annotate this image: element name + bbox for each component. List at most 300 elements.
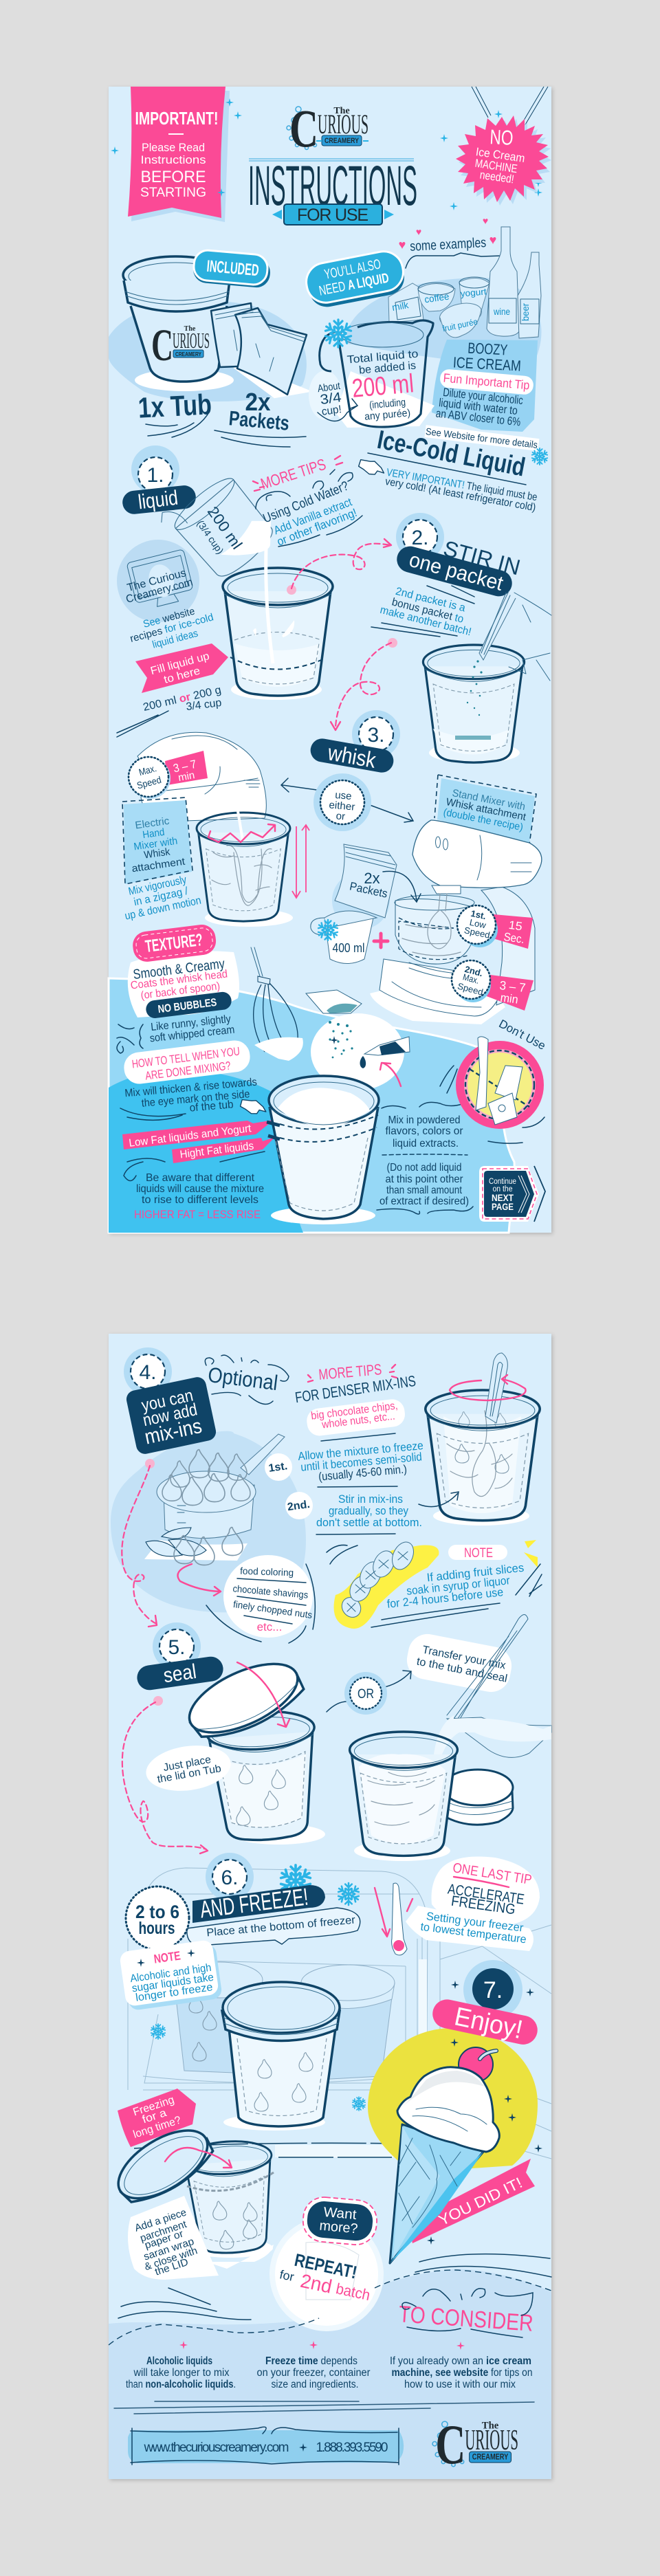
callout: just place lid: the lid on Tub [156,1763,222,1785]
note: alcoholic liquids: Alcoholic and high [129,1962,212,1985]
tag: low fat: Low Fat liquids and Yogurt [129,1123,252,1149]
text: the curious creamery.com: Creamery.com [124,577,194,606]
column: alcoholic liquids [126,2341,236,2390]
infographic: URIOUS [465,2425,518,2456]
step 4: mix-ins [124,1347,217,1455]
pill: note: NOTE [464,1546,493,1561]
panel: page one [109,87,551,1233]
column: ice cream machine: machine, see website for tips on [392,2367,532,2379]
text: like runny: Like runny, slightly [150,1013,232,1033]
label: texture [131,923,217,963]
step 7: enjoy [427,1960,542,2245]
callout: add a piece: parchment [139,2219,188,2245]
icon: big tub with mark [267,1076,379,1224]
hearts: ♥ [490,233,496,247]
label: electric hand mixer: attachment [131,856,186,874]
icon: fruit puree bowl: fruit purée [441,317,478,333]
hearts [399,215,496,252]
badge: max speed: Max. [138,762,157,778]
step 2: stir in: STIR IN [441,536,523,580]
icon: don't use: Don't Use [496,1017,548,1053]
text: second packet [371,586,474,638]
text: boozy ice cream [452,340,521,375]
text: mix in powdered: at this point other [385,1174,463,1185]
note: alcoholic liquids: sugar liquids take [131,1972,214,1994]
ribbon: place at bottom [187,1908,360,1946]
badge: max speed [129,757,170,799]
label: stand mixer: Stand Mixer with [451,787,526,813]
callout: setting freezer: to lowest temperature [420,1921,527,1946]
text: 2x packets [214,388,306,447]
text: stir in mix-ins [316,1493,422,1529]
step 2: stir in: 2. [411,527,429,549]
text: allow mixture [298,1439,424,1484]
ribbon: fill liquid [135,643,228,693]
text: stir in mix-ins: don't settle at bottom. [316,1516,422,1529]
text: no machine: NO [490,126,514,150]
hearts: ♥ [416,226,421,237]
text: mix will thicken: the eye mark on the side [141,1088,250,1110]
text: texture description: Smooth & Creamy [132,956,226,982]
icon: cup two with powder [423,645,525,763]
icon: beer bottle [518,252,541,338]
icon: extract bottle and drop [360,1037,410,1086]
icon: 2x packets and jug: Packets [349,880,389,901]
logo: footer: CREAMERY [472,2454,509,2462]
badge: second max speed: Speed [456,980,484,998]
label: included: INCLUDED [206,257,260,280]
arrow: lid to tub [237,1662,289,1727]
text: mix will thicken: Mix will thicken & rise towards [124,1077,257,1099]
step 6: and freeze: 6. [221,1867,239,1889]
tag: high fat [172,1137,275,1163]
title: instructions [248,155,417,217]
pill: want more [301,2196,379,2247]
icon: use either or: or [336,810,346,823]
snowflake on jug [324,320,352,347]
text: fruit note: soak in syrup or liquor [406,1574,511,1598]
callout: setting freezer [406,1906,534,1951]
text: like runny [117,1013,235,1053]
callout: freezing for a long time: for a [141,2107,168,2126]
text: mix vigorously: in a zigzag / [133,885,189,908]
callout: just place lid: Just place [162,1754,212,1774]
text: please read: Please Read [142,141,205,154]
callout: add a piece [128,2196,274,2280]
step 2: stir in [394,513,523,599]
step 6: and freeze: AND FREEZE! [199,1884,309,1924]
ribbon: fill liquid: Fill liquid up [149,650,211,677]
text: be aware [124,1152,265,1221]
text: very important [358,457,538,514]
zigzag arrow [208,824,275,842]
text: mix in powdered: (Do not add liquid [386,1162,462,1174]
logo: footer: C [435,2413,465,2476]
column: alcoholic liquids: Alcoholic liquids [146,2355,212,2367]
label: electric hand mixer: Hand [142,826,165,841]
icon: front freezer tub [222,1982,340,2126]
step: first: 1st. [268,1460,288,1475]
logo: curious creamery: CREAMERY [324,137,360,145]
text: allow mixture: (usually 45-60 min.) [318,1462,408,1484]
callout: add a piece: paper or [143,2228,185,2252]
ribbon: fill liquid: to here [163,665,201,686]
step 5: seal [135,1622,225,1692]
badge: 2 to 6 hours: hours [139,1919,175,1938]
column: alcoholic liquids: than non-alcoholic liquids. [126,2379,236,2390]
footer rules [114,2401,534,2414]
list: other mix-ins: chocolate shavings [232,1583,309,1600]
sign: continue on next page: on the [492,1185,513,1193]
text: website recipes: See website [142,605,196,630]
sparkles around header [111,98,542,210]
text: be aware: HIGHER FAT = LESS RISE [134,1208,261,1221]
text: about 3/4 cup: About [317,380,342,395]
pill: big chips: whole nuts, etc... [320,1411,396,1431]
icon: whisk cup [197,811,309,927]
text: please read: STARTING [140,186,206,200]
text: total liquid: any purée) [364,407,411,423]
icon: use either or: either [329,799,355,813]
icon: or badge: OR [358,1687,374,1702]
text: second packet: make another batch! [379,604,472,638]
text: second packet: bonus packet to [390,596,465,626]
decorative dashed wave [109,2270,551,2345]
icon: fruit puree bowl [437,300,484,338]
tips: more tips: MORE TIPS [258,455,328,493]
text: mix in powdered [377,1102,473,1214]
liquid examples [388,227,541,338]
callout: add a piece: saran wrap [142,2236,195,2263]
list: other mix-ins: finely chopped nuts [232,1598,313,1620]
snowflakes [151,2024,366,2111]
tips: more tips: Using Cold Water? [261,478,351,526]
callout: how to tell: HOW TO TELL WHEN YOU [131,1044,241,1071]
text: 2x packets: 2x [245,388,271,416]
icon: jug pouring into tub [433,1614,551,1760]
tag: 15 sec [493,914,533,949]
kiwi slices [338,1539,418,1621]
label: electric hand mixer: Whisk [143,846,171,861]
text: mix will thicken: of the tub [189,1099,234,1114]
logo on tub: C [151,320,173,371]
label: electric hand mixer [122,797,192,884]
text: 1x tub: 1x Tub [138,388,212,424]
text: transfer your mix: to the tub and seal [415,1655,508,1685]
text: 200 ml or 200 g [117,684,222,737]
infographic: INSTRUCTIONS [248,155,417,217]
tilted lid [179,1650,309,1750]
callout: one last tip: ONE LAST TIP [452,1860,533,1888]
heading: to consider: TO CONSIDER [398,2301,534,2337]
text: mix in powdered: Mix in powdered [388,1114,461,1126]
hearts: ♥ [483,215,488,226]
icon: thermometer [375,1883,419,1955]
text: please read [140,141,206,200]
list: other mix-ins: food coloring [240,1565,294,1578]
lower wave background [109,2269,551,2479]
badge: repeat [270,2217,384,2331]
text: transfer your mix [404,1631,515,1695]
freezer outline [128,1868,551,2159]
icon: spare lid [442,1770,513,1825]
arrow: step 5 to step 6 [122,1696,208,1853]
step 4: mix-ins: you can [140,1386,195,1416]
text: total liquid: 200 ml [351,369,415,404]
blob: mix-ins background [111,1431,306,1612]
ribbon: you did it: YOU DID IT! [436,2174,525,2229]
badge: repeat: for [278,2267,296,2284]
tips: denser mix-ins: MORE TIPS [318,1361,382,1383]
badge: 2 to 6 hours: 2 to 6 [135,1902,179,1922]
icon: measuring cup with chips [144,1434,285,1565]
badge: first low speed: 1st. [470,908,487,921]
callout: one last tip: ACCELERATE [447,1881,525,1908]
arrow: mix-ins to list [177,1564,221,1596]
footer: contact band: www.thecuriouscreamery.com [143,2441,289,2455]
yellow circle behind ice cream [368,2028,538,2172]
text: please read: Instructions [140,153,206,166]
arrow: step 4 to step 5 [122,1459,157,1627]
tips: denser mix-ins [265,1361,424,1534]
text: 200 ml or 200 g: 3/4 cup [186,697,222,713]
text: important: IMPORTANT! [135,108,219,129]
icon: use either or: use [335,789,352,802]
text: mix in powdered: flavors, colors or [385,1125,463,1137]
text: no machine: needed! [479,168,515,186]
tag: 3-7 min: 3 – 7 [172,758,197,775]
text: 200 ml or 200 g: 200 ml or 200 g [142,684,222,714]
text: texture description [130,956,228,1002]
list: other mix-ins [206,1555,315,1643]
text: no machine: Ice Cream [475,145,526,165]
text: jug volume: (3/4 cup) [195,518,226,556]
tag: 3-7 min: min [177,769,196,784]
icon: powder packet and dots [306,990,362,1058]
label: electric hand mixer: Mixer with [133,835,178,852]
logo: curious creamery [287,98,368,158]
column: freeze time: on your freezer, container [257,2367,370,2379]
subtitle: for use: FOR USE [297,206,368,225]
text: mix vigorously: up & down motion [124,895,202,923]
column: freeze time [257,2341,370,2390]
tag: 3-7 min: 3 – 7 [499,978,527,995]
heading: ice-cold liquid: Ice-Cold Liquid [375,426,527,483]
icon: cup with spoon [419,1353,540,1526]
pill: no bubbles: NO BUBBLES [157,997,217,1015]
panel: boozy ice cream tip [432,340,538,432]
text: 2x packets: Packets [228,407,290,435]
ribbon: you did it [408,2159,535,2243]
label: you'll also need a liquid [303,248,407,310]
step: first [265,1453,292,1481]
step 3: whisk: whisk [325,740,378,773]
tips: more tips: or other flavoring! [275,506,359,549]
text: boozy ice cream: BOOZY [468,340,508,359]
badge: repeat: batch [335,2280,372,2304]
badge: first low speed: Low [469,917,487,931]
text: the curious creamery.com: The Curious [126,567,188,594]
logo: footer: The [482,2421,499,2432]
text: total liquid: be added is [359,360,417,377]
ribbon: place at bottom: Place at the bottom of freezer [206,1915,356,1939]
icon: tub with logo: URIOUS [173,328,210,353]
blob: texture panel [128,951,239,1017]
callout: one last tip: FREEZING [450,1893,516,1917]
badge: second max speed: Max. [462,971,481,986]
tag: 3-7 min [485,975,534,1011]
callout: just place lid [143,1741,234,1796]
icon: milk carton: milk [391,299,410,313]
step 4: mix-ins: 4. [139,1361,157,1384]
text: mix will thicken [120,1077,268,1120]
tips: more tips [253,455,362,549]
icon: ice cream cone [390,2047,535,2263]
icon: or badge [327,1671,411,1715]
text: 1x tub [138,388,212,437]
icon: 2x packets and jug: 2x [364,870,380,887]
text: dilute: liquid with water to [438,396,518,417]
logo: footer [432,2413,518,2476]
step 5: seal: seal [162,1660,198,1687]
infographic: URIOUS [318,109,368,140]
step: second [285,1492,313,1519]
callout: freezing for a long time: Freezing [132,2094,176,2118]
badge: 2 to 6 hours [126,1886,189,1950]
text: stir in mix-ins: Stir in mix-ins [338,1493,403,1506]
tag: 3-7 min [165,751,208,785]
chocolate chips [162,1450,250,1506]
footer: contact band [128,2427,404,2465]
text: dilute: Dilute your alcoholic [442,386,524,407]
powder falling [455,660,491,740]
text: mix vigorously [124,874,202,923]
pill: want more: more? [319,2219,358,2236]
text: fruit note: If adding fruit slices [426,1561,525,1584]
label: stand mixer [434,775,536,844]
forbidden tools [476,1037,522,1125]
text: total liquid [346,349,419,423]
icon: 400 ml jug: 400 ml [333,941,364,955]
callout: how to tell: ARE DONE MIXING? [144,1059,232,1083]
freezer shelf lines [134,2143,402,2157]
text: please read: BEFORE [140,168,206,186]
logo on tub: The [184,325,196,333]
text: transfer your mix: Transfer your mix [421,1644,507,1672]
icon: stand mixer [370,820,542,1024]
column: ice cream machine: how to use it with our mix [404,2379,516,2390]
tags: fat levels [122,1120,275,1163]
step: second: 2nd. [287,1499,311,1513]
logo on tub [151,320,210,371]
panel: page two [109,1334,551,2479]
text: second packet: 2nd packet is a [395,586,467,614]
heading: optional [205,1355,289,1404]
heading: to consider [398,2289,534,2350]
list: other mix-ins: etc... [257,1620,282,1633]
text: some examples [406,235,502,268]
callout: add a piece: & close with [143,2245,199,2273]
pill: no bubbles [145,991,232,1019]
text: dilute: an ABV closer to 6% [435,407,521,428]
text: no machine: MACHINE [474,157,518,175]
badge: no ice cream machine [456,87,551,206]
text: jug volume: 200 ml [204,503,245,553]
note: alcoholic liquids: longer to freeze [135,1981,214,2004]
text: texture description: (or back of spoon) [140,980,221,1002]
tag: 3-7 min: min [500,991,519,1006]
text: about 3/4 cup: cup! [321,404,342,418]
mid blue wave background [109,978,514,1233]
text: allow mixture: Allow the mixture to freeze [298,1439,424,1463]
label: you'll also need a liquid: NEED A LIQUID [318,270,390,299]
text: see website: See Website for more details [425,426,538,450]
column: alcoholic liquids: will take longer to mix [133,2367,230,2379]
label: you'll also need a liquid: YOU'LL ALSO [323,256,382,283]
icon: beer bottle: beer [520,303,531,321]
tips: more tips: Add Vanilla extract [272,495,354,537]
badge: first low speed: Speed [463,925,491,940]
tip pill: Fun Important Tip [443,371,530,392]
badges: mixer speeds [452,905,534,1011]
deep blue wave background [109,1070,303,1233]
column: freeze time: Freeze time depends [265,2355,358,2367]
step 6: and freeze [192,1853,360,1924]
text: about 3/4 cup: 3/4 [319,390,342,408]
column: freeze time: size and ingredients. [271,2379,359,2390]
pill: want more: Want [323,2205,358,2223]
text: total liquid: Total liquid to [346,349,419,366]
text: mix in powdered: of extract if desired) [380,1196,469,1207]
text: very important: very cold! (At least refrigerator cold) [384,476,537,514]
note: fruit slices [327,1539,542,1629]
callout: setting freezer: Setting your freezer [426,1910,525,1935]
text: dilute [435,386,524,428]
icon: yogurt cup [459,277,490,311]
step 1: liquid [122,445,197,515]
text: about 3/4 cup [317,380,342,418]
text: boozy ice cream: ICE CREAM [452,353,521,375]
callout: freezing for a long time: long time? [132,2114,183,2141]
decorative swooshes [118,2254,551,2320]
pill: note [448,1545,507,1561]
banner: important [128,87,230,222]
step 3: whisk [309,710,400,774]
text: be aware: Be aware that different [146,1172,255,1184]
step 7: enjoy: Enjoy! [452,2002,525,2045]
step 3: whisk: 3. [367,724,385,747]
white blob: powder [311,1013,404,1090]
sign: continue on next page: NEXT [492,1192,514,1203]
subtitle: for use [272,204,394,225]
logo: curious creamery: The [333,106,350,116]
pill: big chips: big chocolate chips, [310,1400,399,1422]
icon: hand mixer [129,732,266,822]
step 7: enjoy: 7. [483,1977,503,2003]
text: texture description: Coats the whisk head [130,968,228,992]
logo: curious creamery: C [289,98,318,158]
callout: freezing for a long time [118,2089,196,2147]
text: website recipes: recipes for ice-cold [129,611,214,645]
label: stand mixer: Whisk attachment [445,796,527,823]
text: mix in powdered: than small amount [386,1185,462,1196]
text: be aware: to rise to different levels [142,1194,258,1206]
label: included [192,249,272,289]
icon: plus [374,934,388,947]
label: stand mixer: (double the recipe) [442,806,524,833]
step 4: mix-ins: mix-ins [143,1415,204,1449]
icon: coffee cup: coffee [424,291,450,305]
